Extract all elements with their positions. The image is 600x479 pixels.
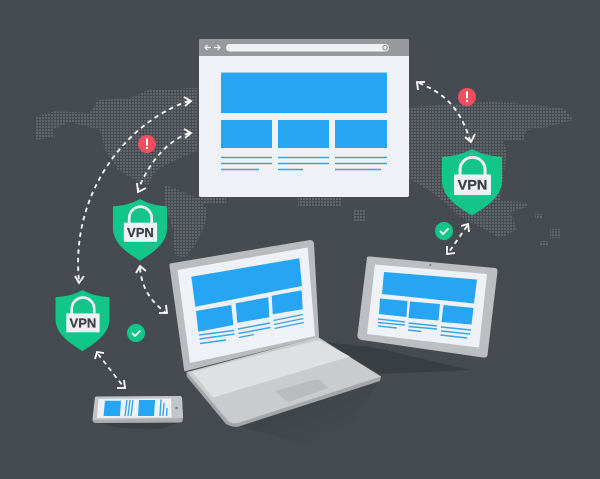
- laptop content boxes: [196, 290, 303, 332]
- laptop base: [186, 372, 381, 427]
- tablet banner: [382, 272, 477, 304]
- device shadows: [100, 342, 470, 448]
- laptop: [170, 240, 381, 427]
- tablet camera: [429, 264, 431, 266]
- laptop text lines: [199, 314, 304, 344]
- connection arrows: [75, 82, 475, 388]
- tablet text lines: [378, 319, 471, 338]
- smartphone content boxes: [104, 400, 155, 416]
- alert icon left: [138, 135, 156, 153]
- browser window: [199, 39, 409, 197]
- tablet screen: [367, 264, 487, 348]
- smartphone text lines: [125, 400, 167, 416]
- VPN shield left upper: [113, 199, 167, 261]
- laptop screen: [178, 248, 315, 363]
- check icon left: [127, 324, 145, 342]
- laptop trackpad: [275, 379, 328, 402]
- dotted world map: [35, 88, 574, 258]
- tablet: [357, 256, 498, 358]
- VPN shield right: [442, 149, 502, 216]
- VPN shield left lower: VPN: [70, 315, 96, 330]
- VPN shield left upper: VPN: [127, 225, 154, 240]
- VPN shield left lower: [56, 290, 110, 351]
- web page text lines: [221, 158, 387, 170]
- VPN shield right: VPN: [458, 178, 487, 194]
- navigation arrows: [205, 45, 220, 50]
- laptop banner: [191, 258, 302, 307]
- tablet content boxes: [379, 298, 474, 324]
- smartphone: [92, 396, 183, 423]
- check icon right: [435, 222, 453, 240]
- browser title bar: [199, 39, 409, 56]
- laptop lid: [170, 240, 319, 371]
- smartphone home button: [175, 407, 178, 409]
- smartphone screen: [97, 398, 172, 418]
- address bar: [226, 44, 389, 52]
- reload icon: [383, 46, 387, 50]
- laptop keyboard deck: [192, 340, 350, 398]
- alert icon right: [458, 88, 476, 106]
- web page content boxes: [221, 120, 387, 148]
- web page banner: [221, 72, 387, 113]
